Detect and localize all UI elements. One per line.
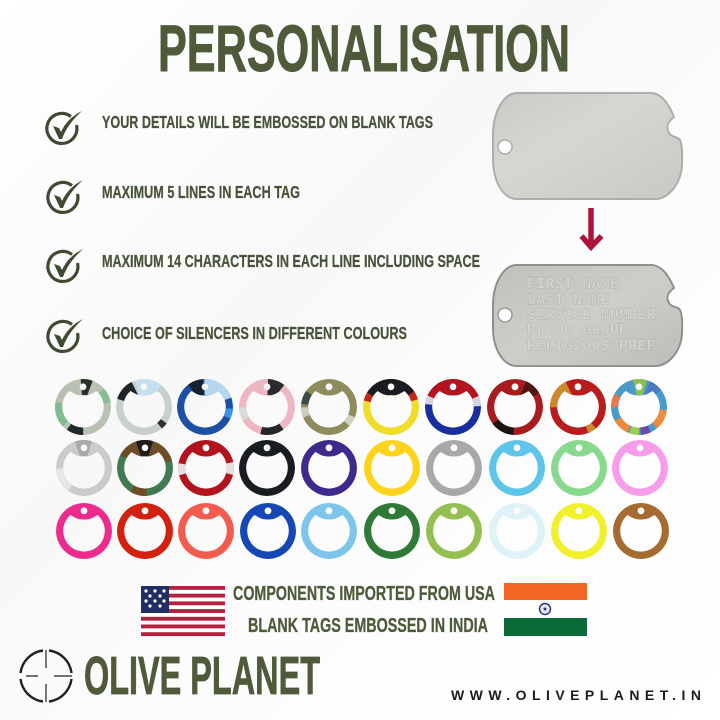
ring: sky blue [489,440,545,496]
silencer colour rings [55,379,669,559]
ring: black [239,440,295,496]
embossed text: BLOOD GROUP [527,322,628,339]
embossed text: SERVICE NUMBER [527,307,656,324]
embossed text: LAST NAME [527,292,610,309]
ring: rainbow swirl [611,379,667,435]
ring: light green [551,440,607,496]
ring: pale blue [301,503,357,559]
ring: blue-grey camo [116,379,172,435]
icon: check 2 [48,180,83,212]
ring: red [117,503,173,559]
arrow: blank to embossed [582,208,602,247]
text: blank tags embossed: BLANK TAGS EMBOSSED IN INDIA [248,615,488,637]
ring: light pink [612,440,668,496]
ring: brown [613,503,669,559]
ring: blue swirl [177,379,233,435]
text: five lines: MAXIMUM 5 LINES IN EACH TAG [102,182,300,202]
text: details embossed: YOUR DETAILS WILL BE EMBOSSED ON BLANK TAGS [102,112,433,132]
icon: check 4 [48,319,83,351]
ring: grey [426,440,482,496]
ring: green camo [55,379,111,435]
ring: yellow [364,440,420,496]
ring: forest green [364,503,420,559]
ring: purple [301,440,357,496]
logo: reticle icon [20,650,72,702]
ring: red white blue [425,379,481,435]
icon: check 3 [48,249,83,281]
ring: light grey [56,440,112,496]
icon: usa flag [141,586,225,636]
ring: hot pink [56,503,112,559]
embossed text: FIRST NAME [527,276,619,293]
embossed text: RELIGIOUS PREF [527,338,656,355]
text: silencers: CHOICE OF SILENCERS IN DIFFERENT COLOURS [102,323,407,343]
ring: pink swirl [239,379,295,435]
blank dog tag [493,93,682,199]
ring: red white swirl [178,440,234,496]
feature list [47,111,480,351]
text: fourteen characters: MAXIMUM 14 CHARACTERS IN EACH LINE INCLUDING SPACE [102,251,480,271]
ring: olive camo [301,379,357,435]
icon: check 1 [47,111,82,143]
ring: red black swirl [487,379,543,435]
ring: lime green [426,503,482,559]
logo: wordmark: OLIVE PLANET [84,646,320,706]
text: components imported: COMPONENTS IMPORTED FROM USA [233,583,495,605]
ring: black red yellow [363,379,419,435]
ring: coral [178,503,234,559]
ring: neon yellow [551,503,607,559]
website url: WWW.OLIVEPLANET.IN [451,687,701,703]
ring: woodland camo [117,440,173,496]
embossed text [527,276,656,355]
ring: red orange swirl [550,379,606,435]
embossed dog tag [493,265,682,366]
ring: royal blue [240,503,296,559]
icon: india flag [504,583,587,636]
ring: glow white [489,503,545,559]
